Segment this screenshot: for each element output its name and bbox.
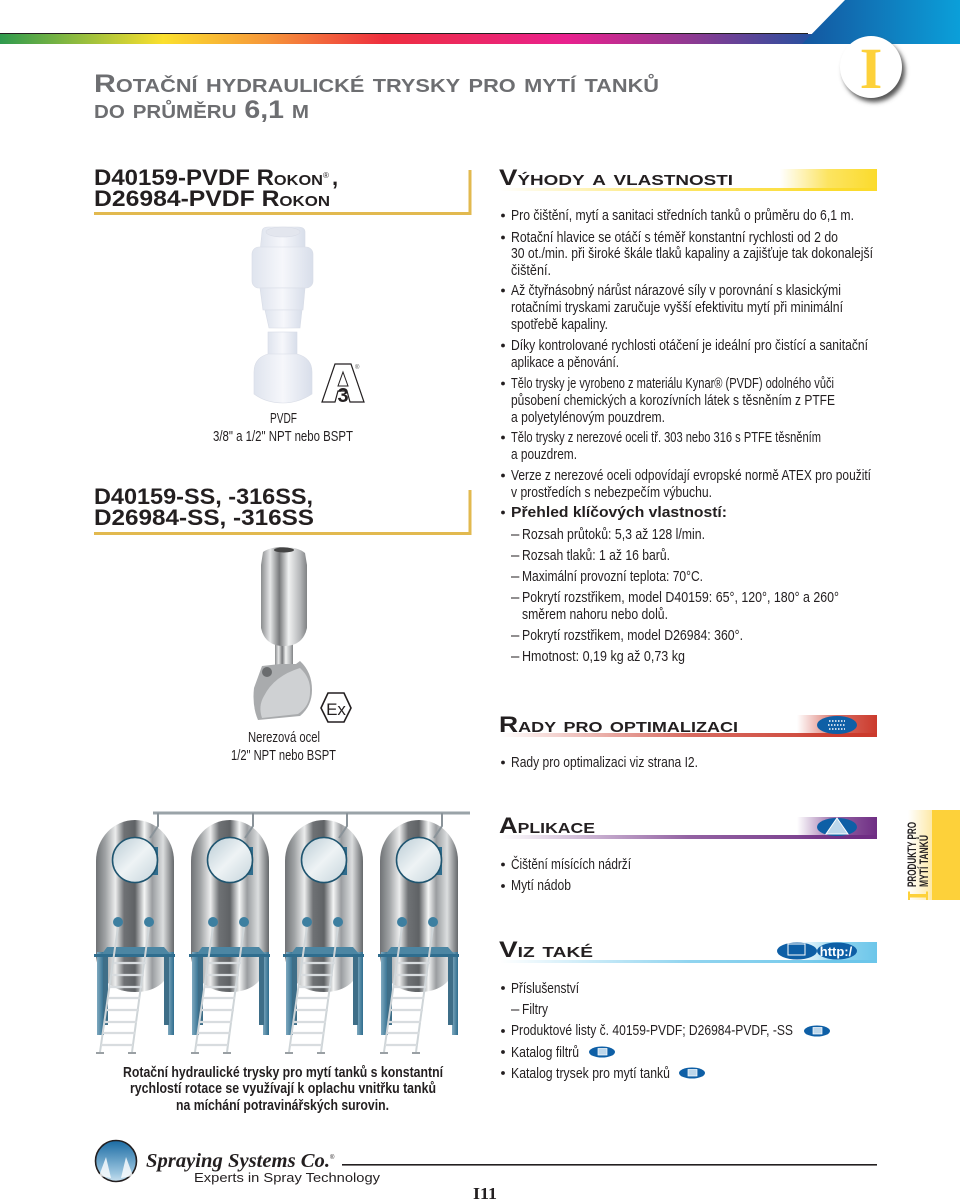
heading: Rady pro optimalizaci xyxy=(499,712,877,737)
list: benefits: – xyxy=(511,627,520,644)
list: benefits: Pro čištění, mytí a sanitaci středních tanků o průměru do 6,1 m. xyxy=(511,207,854,224)
list: benefits: – xyxy=(511,547,520,564)
icon: Ex mark: Ex xyxy=(326,700,346,719)
side tab xyxy=(905,810,960,900)
list: benefits: spotřebě kapaliny. xyxy=(511,316,608,333)
caption: tanks: na míchání potravinářských surovin. xyxy=(176,1097,389,1114)
footer logo: Spraying Systems Co. xyxy=(146,1150,330,1172)
list: benefits xyxy=(501,207,874,665)
list: see also: Katalog trysek pro mytí tanků xyxy=(511,1065,670,1082)
list: benefits: čištění. xyxy=(511,262,551,279)
list: benefits: Verze z nerezové oceli odpovídají evropské normě ATEX pro použití xyxy=(511,467,872,484)
list: applications: Mytí nádob xyxy=(511,877,571,894)
list: benefits: rotačními tryskami zaručuje vyšší efektivitu mytí při minimální xyxy=(511,299,844,316)
heading: Aplikace: Aplikace xyxy=(499,813,595,838)
caption: PVDF: PVDF xyxy=(270,410,297,427)
list: see also: Filtry xyxy=(522,1001,548,1018)
heading: Aplikace xyxy=(499,813,877,839)
list: benefits: – xyxy=(511,526,520,543)
list: benefits: – xyxy=(511,589,520,606)
caption: stainless xyxy=(231,729,336,764)
list: benefits: Až čtyřnásobný nárůst nárazové síly v porovnání s klasickými xyxy=(511,282,841,299)
photo: stainless nozzle xyxy=(254,547,312,720)
list: see also: – xyxy=(511,1001,520,1018)
icon: 3-A sanitary mark: 3 xyxy=(337,385,349,407)
caption: PVDF: 3/8" a 1/2" NPT nebo BSPT xyxy=(213,428,353,445)
list: benefits: Přehled klíčových vlastností: xyxy=(511,504,727,521)
list: benefits: 30 ot./min. při široké škále tlaků kapaliny a zajišťuje tak dokonalejší xyxy=(511,245,874,262)
illustration: tanks xyxy=(94,812,470,1053)
heading: Rady pro optimalizaci: Rady pro optimalizaci xyxy=(499,712,738,737)
text: optimisation: Rady pro optimalizaci viz strana I2. xyxy=(511,754,698,771)
list: benefits: a polyetylénovým pouzdrem. xyxy=(511,409,665,426)
caption: tanks: rychlostí rotace se využívají k oplachu vnitřku tanků xyxy=(130,1080,436,1097)
heading: PVDF models: D40159-PVDF Rokon xyxy=(94,165,323,190)
footer line xyxy=(342,1164,877,1166)
heading: Viz také xyxy=(499,937,877,963)
list: applications: Čištění mísících nádrží xyxy=(511,856,632,873)
heading: Viz také: Viz také xyxy=(499,937,593,962)
caption: tanks: Rotační hydraulické trysky pro mytí tanků s konstantní xyxy=(123,1064,444,1081)
list: benefits: – xyxy=(511,568,520,585)
list: benefits: Tělo trysky z nerezové oceli tř. 303 nebo 316 s PTFE těsněním xyxy=(511,429,821,446)
top colour band xyxy=(0,33,960,44)
section tab I circle xyxy=(840,36,905,102)
list: benefits: Rozsah tlaků: 1 až 16 barů. xyxy=(522,547,670,564)
section tab I circle: I xyxy=(860,36,882,101)
list: benefits: Pokrytí rozstřikem, model D26984: 360°. xyxy=(522,627,743,644)
list: benefits: Tělo trysky je vyrobeno z materiálu Kynar® (PVDF) odolného vůči xyxy=(511,375,834,392)
heading: PVDF models: ® xyxy=(323,171,329,180)
heading: PVDF models: , xyxy=(332,165,338,190)
side tab: PRODUKTY PRO xyxy=(905,822,919,887)
list: see also: Katalog filtrů xyxy=(511,1044,579,1061)
heading: SS models: D40159-SS, -316SS, xyxy=(94,484,313,509)
list: see also: Produktové listy č. 40159-PVDF; D26984-PVDF, -SS xyxy=(511,1022,793,1039)
footer logo: ® xyxy=(330,1154,335,1161)
heading: Viz také: http:/ xyxy=(820,944,853,959)
heading: SS models: D26984-SS, -316SS xyxy=(94,505,314,530)
caption: tanks xyxy=(123,1064,444,1114)
icon: Ex mark xyxy=(321,693,351,722)
list: benefits: působení chemických a korozívních látek s těsněním z PTFE xyxy=(511,392,835,409)
heading: PVDF models: D26984-PVDF Rokon xyxy=(94,186,330,211)
list: benefits: aplikace a pěnování. xyxy=(511,354,619,371)
caption: stainless: 1/2" NPT nebo BSPT xyxy=(231,747,336,764)
icon: 3-A sanitary mark: ® xyxy=(355,364,360,371)
blue corner shape xyxy=(802,0,960,44)
caption: stainless: Nerezová ocel xyxy=(248,729,320,746)
list: benefits: Pokrytí rozstřikem, model D40159: 65°, 120°, 180° a 260° xyxy=(522,589,839,606)
list: benefits: Hmotnost: 0,19 kg až 0,73 kg xyxy=(522,648,685,665)
list: benefits: Rozsah průtoků: 5,3 až 128 l/min. xyxy=(522,526,705,543)
heading: Výhody a vlastnosti: Výhody a vlastnosti xyxy=(499,165,733,190)
caption: PVDF xyxy=(213,410,353,445)
list: benefits: Maximální provozní teplota: 70°C. xyxy=(522,568,703,585)
footer logo: Experts in Spray Technology xyxy=(194,1170,381,1185)
heading: PVDF models xyxy=(94,165,470,214)
list: see also: Příslušenství xyxy=(511,980,580,997)
list: applications xyxy=(501,856,632,894)
footer logo xyxy=(96,1140,381,1185)
list: benefits: směrem nahoru nebo dolů. xyxy=(522,606,668,623)
photo: PVDF nozzle xyxy=(252,227,313,403)
icon: 3-A sanitary mark xyxy=(322,364,364,407)
list: benefits: Rotační hlavice se otáčí s téměř konstantní rychlosti od 2 do xyxy=(511,229,838,246)
side tab: MYTÍ TANKŮ xyxy=(915,835,931,887)
title: do průměru 6,1 m xyxy=(94,96,309,124)
heading: Výhody a vlastnosti xyxy=(499,165,877,191)
list: benefits: Díky kontrolované rychlosti otáčení je ideální pro čistící a sanitační xyxy=(511,337,869,354)
list: benefits: – xyxy=(511,648,520,665)
list: benefits: v prostředích s nebezpečím výbuchu. xyxy=(511,484,712,501)
title: Rotační hydraulické trysky pro mytí tanků xyxy=(94,70,659,98)
title xyxy=(94,70,659,124)
list: see also xyxy=(501,980,830,1082)
list: benefits: a pouzdrem. xyxy=(511,446,577,463)
heading: SS models xyxy=(94,484,470,534)
